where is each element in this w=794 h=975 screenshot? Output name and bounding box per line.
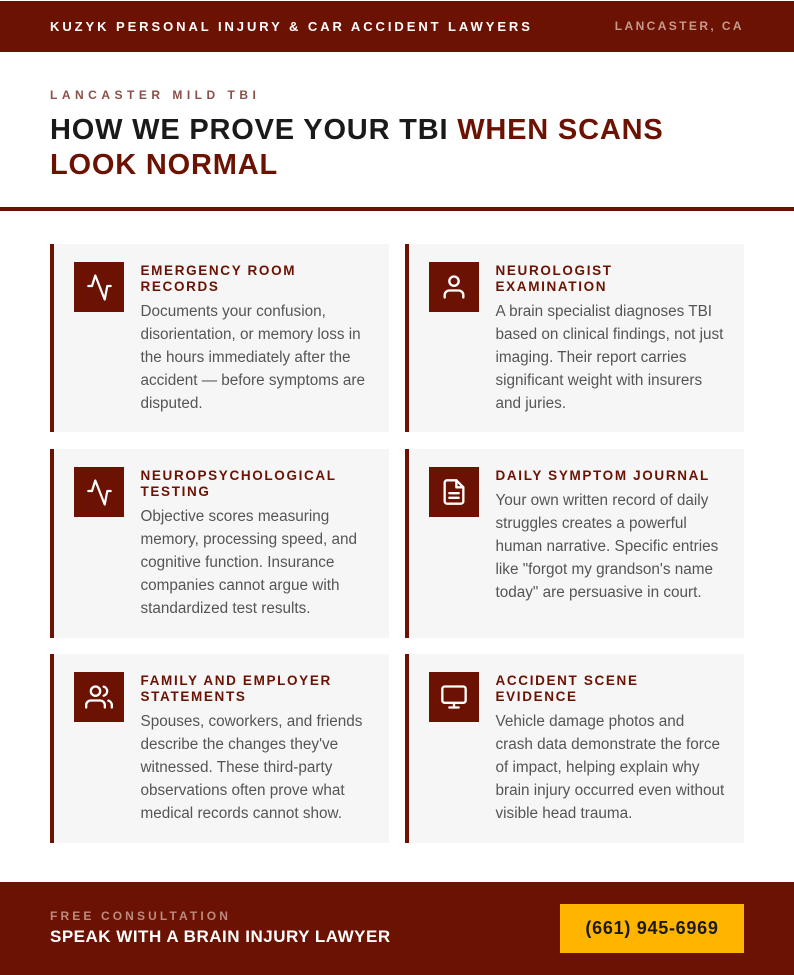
card text: witnessed. These third-party bbox=[140, 759, 332, 776]
card text bbox=[140, 303, 365, 412]
card text: today" are persuasive in court. bbox=[496, 584, 702, 601]
card text: Documents your confusion, bbox=[140, 303, 326, 320]
card text: struggles creates a powerful bbox=[496, 515, 687, 532]
card heading: FAMILY AND EMPLOYER bbox=[140, 673, 332, 688]
card text bbox=[496, 303, 724, 412]
footer heading: SPEAK WITH A BRAIN INJURY LAWYER bbox=[50, 927, 391, 946]
title section bbox=[0, 52, 794, 211]
card text: memory, processing speed, and bbox=[140, 531, 357, 548]
card heading: EXAMINATION bbox=[496, 279, 607, 294]
location: LANCASTER, CA bbox=[615, 19, 744, 33]
card heading: EVIDENCE bbox=[496, 689, 578, 704]
card: accident scene evidence bbox=[405, 654, 744, 843]
card text: observations often prove what bbox=[140, 782, 345, 799]
card text: Spouses, coworkers, and friends bbox=[140, 713, 362, 730]
card heading: STATEMENTS bbox=[140, 689, 246, 704]
card text: of impact, helping explain why bbox=[496, 759, 700, 776]
card text: significant weight with insurers bbox=[496, 372, 702, 389]
card text: accident — before symptoms are bbox=[140, 372, 365, 389]
card heading bbox=[140, 673, 332, 704]
icon: document bbox=[429, 467, 479, 517]
card heading bbox=[140, 263, 296, 294]
card text: medical records cannot show. bbox=[140, 805, 342, 822]
header bar bbox=[0, 1, 794, 52]
firm name: KUZYK PERSONAL INJURY & CAR ACCIDENT LAWYERS bbox=[50, 19, 533, 34]
card heading: NEUROPSYCHOLOGICAL bbox=[140, 468, 337, 483]
phone button bbox=[560, 904, 744, 953]
card: neuropsychological testing bbox=[50, 449, 389, 638]
card text bbox=[496, 492, 718, 601]
card heading: DAILY SYMPTOM JOURNAL bbox=[496, 468, 710, 483]
card text: Your own written record of daily bbox=[496, 492, 708, 509]
card heading: ACCIDENT SCENE bbox=[496, 673, 639, 688]
icon: monitor bbox=[429, 672, 479, 722]
card text: standardized test results. bbox=[140, 600, 311, 617]
card text: the hours immediately after the bbox=[140, 349, 351, 366]
main heading: HOW WE PROVE YOUR TBI WHEN SCANS bbox=[50, 114, 663, 146]
card text: based on clinical findings, not just bbox=[496, 326, 723, 343]
card text: Objective scores measuring bbox=[140, 508, 329, 525]
card text: human narrative. Specific entries bbox=[496, 538, 718, 555]
icon: activity pulse bbox=[74, 467, 124, 517]
card: neurologist examination bbox=[405, 244, 744, 432]
card heading bbox=[140, 468, 337, 499]
main heading: LOOK NORMAL bbox=[50, 149, 278, 181]
card: daily symptom journal bbox=[405, 449, 744, 638]
card: family and employer statements bbox=[50, 654, 389, 843]
main heading bbox=[50, 114, 663, 181]
card text: imaging. Their report carries bbox=[496, 349, 687, 366]
footer bar bbox=[0, 882, 794, 975]
card text bbox=[140, 713, 362, 822]
footer eyebrow: FREE CONSULTATION bbox=[50, 909, 231, 923]
card text: visible head trauma. bbox=[496, 805, 632, 822]
card text bbox=[140, 508, 357, 617]
phone button: (661) 945-6969 bbox=[585, 918, 719, 938]
card heading: RECORDS bbox=[140, 279, 220, 294]
card heading: NEUROLOGIST bbox=[496, 263, 613, 278]
card text bbox=[496, 713, 724, 822]
card heading: TESTING bbox=[140, 484, 211, 499]
card: emergency room records bbox=[50, 244, 389, 432]
card text: like "forgot my grandson's name bbox=[496, 561, 713, 578]
card text: disorientation, or memory loss in bbox=[140, 326, 361, 343]
eyebrow: LANCASTER MILD TBI bbox=[50, 88, 260, 102]
card text: A brain specialist diagnoses TBI bbox=[496, 303, 712, 320]
icon: person bbox=[429, 262, 479, 312]
card text: crash data demonstrate the force bbox=[496, 736, 720, 753]
card text: brain injury occurred even without bbox=[496, 782, 724, 799]
card text: disputed. bbox=[140, 395, 203, 412]
card heading bbox=[496, 673, 639, 704]
card heading: EMERGENCY ROOM bbox=[140, 263, 296, 278]
icon: people bbox=[74, 672, 124, 722]
card text: companies cannot argue with bbox=[140, 577, 339, 594]
icon: activity pulse bbox=[74, 262, 124, 312]
card text: cognitive function. Insurance bbox=[140, 554, 334, 571]
card text: Vehicle damage photos and bbox=[496, 713, 684, 730]
card text: and juries. bbox=[496, 395, 566, 412]
card text: describe the changes they've bbox=[140, 736, 338, 753]
card heading bbox=[496, 263, 613, 294]
